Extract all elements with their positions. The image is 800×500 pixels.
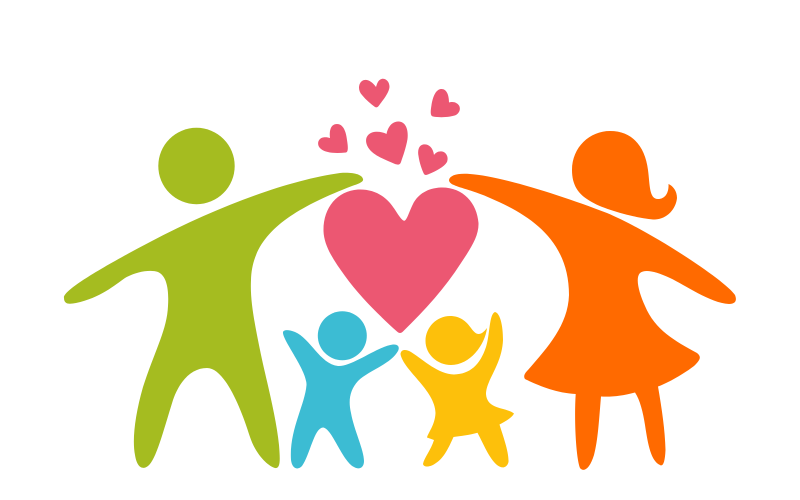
- small heart left: [318, 124, 348, 153]
- girl head and hair: [426, 316, 487, 365]
- father head: [158, 128, 235, 204]
- mother figure: [449, 131, 736, 470]
- mother head and hair: [572, 131, 677, 220]
- large heart: [323, 187, 479, 333]
- boy body: [283, 330, 399, 468]
- small heart right: [418, 144, 448, 175]
- boy head: [318, 311, 367, 360]
- girl body and skirt: [400, 312, 514, 467]
- small heart top: [359, 79, 390, 107]
- father figure: [64, 128, 363, 468]
- boy figure: [283, 311, 399, 468]
- girl figure: [400, 312, 514, 467]
- father body: [64, 173, 363, 468]
- small heart upper right: [431, 89, 460, 117]
- mother body and dress: [449, 174, 736, 470]
- small heart center: [366, 121, 408, 165]
- hearts: [318, 79, 479, 333]
